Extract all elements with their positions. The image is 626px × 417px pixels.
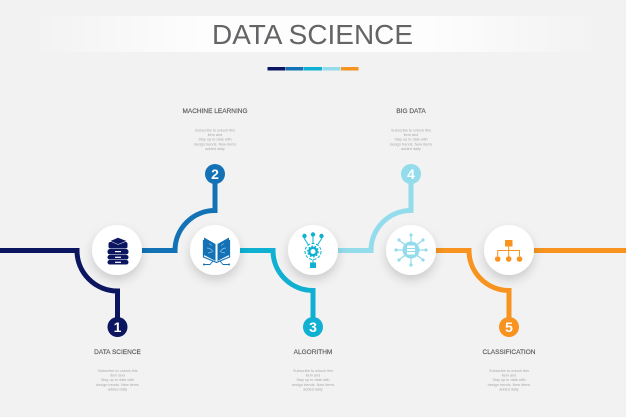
body text 3: item and: [306, 374, 320, 378]
body text 5: added daily: [499, 387, 519, 391]
body text 1: Subscribe to unlock this: [97, 369, 138, 373]
step badge 3: 3: [309, 319, 317, 335]
connector 2: [140, 174, 215, 250]
step badge 5: 5: [505, 319, 513, 335]
colour legend bar: [268, 67, 358, 70]
body text 1: added daily: [108, 387, 127, 391]
body text 3: Subscribe to unlock this: [293, 369, 333, 373]
connector 3: [238, 250, 313, 327]
body text 4: Subscribe to unlock this: [391, 128, 431, 132]
step badge 5: [499, 317, 519, 337]
heading: classification: CLASSIFICATION: [483, 349, 536, 356]
body text 4: added daily: [401, 147, 421, 151]
body text 5: item and: [502, 374, 516, 378]
body text 2: design trends. New items: [194, 142, 236, 146]
body text 2: Stay up to date with: [198, 138, 232, 142]
body text 5: Stay up to date with: [492, 378, 526, 382]
title band: [30, 16, 600, 52]
body text 3: design trends. New items: [292, 383, 334, 387]
body text 3: Stay up to date with: [296, 378, 330, 382]
body text 2: item and: [208, 133, 222, 137]
icon: database with graduation cap: [108, 238, 128, 264]
heading: data science: DATA SCIENCE: [94, 349, 142, 356]
heading: machine learning: MACHINE LEARNING: [182, 108, 248, 115]
body text 1: design trends. New items: [96, 383, 139, 387]
body text 1: Stay up to date with: [101, 378, 134, 382]
icon: classification hierarchy: [495, 240, 522, 262]
body text 2: added daily: [205, 147, 225, 151]
step badge 1: 1: [114, 319, 122, 335]
body text 2: Subscribe to unlock this: [195, 128, 235, 132]
step badge 2: [205, 164, 225, 184]
icon: open book with brain: [203, 238, 230, 266]
connector 1: [0, 250, 118, 327]
body text 3: added daily: [303, 387, 323, 391]
connector 6: [532, 248, 626, 253]
body text 5: design trends. New items: [488, 383, 530, 387]
icon disc 5: [484, 225, 534, 275]
connector 5: [434, 250, 509, 327]
connector 4: [336, 174, 411, 250]
icon: algorithm gear with nodes: [302, 232, 324, 268]
heading: algorithm: ALGORITHM: [294, 349, 332, 356]
body text 4: design trends. New items: [390, 142, 432, 146]
step badge 2: 2: [211, 166, 219, 182]
icon disc 2: [190, 225, 240, 275]
icon: big data hub: [394, 233, 428, 267]
title: DATA SCIENCE: [212, 19, 413, 50]
step badge 4: 4: [407, 166, 415, 182]
icon disc 3: [288, 225, 338, 275]
heading: big data: BIG DATA: [396, 108, 426, 115]
body text 5: Subscribe to unlock this: [489, 369, 529, 373]
step badge 3: [303, 317, 323, 337]
body text 1: item and: [110, 374, 125, 378]
step badge 1: [108, 317, 128, 337]
icon disc 1: [92, 225, 142, 275]
step badge 4: [401, 164, 421, 184]
body text 4: item and: [404, 133, 418, 137]
body text 4: Stay up to date with: [394, 138, 428, 142]
icon disc 4: [386, 225, 436, 275]
